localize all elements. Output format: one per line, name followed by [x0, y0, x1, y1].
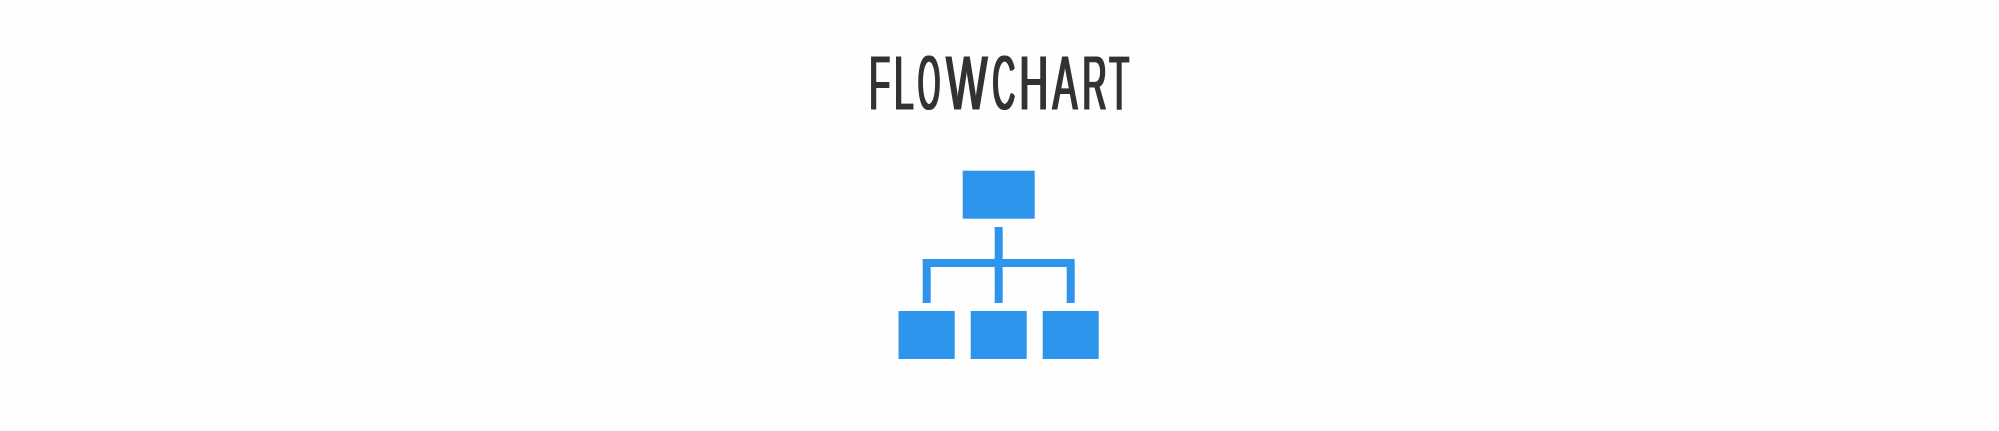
title: T: [1109, 41, 1129, 126]
bottom left box: [898, 311, 955, 359]
title: H: [1019, 40, 1048, 126]
title: [869, 39, 1129, 127]
connector lines: [923, 227, 1075, 303]
top box: [963, 171, 1035, 219]
title: O: [918, 42, 940, 127]
title: C: [992, 41, 1015, 126]
title: W: [946, 42, 987, 126]
title: A: [1053, 41, 1077, 126]
bottom right box: [1043, 311, 1099, 359]
icon: flowchart hierarchy: [898, 171, 1099, 359]
title: R: [1083, 39, 1107, 126]
bottom middle box: [971, 311, 1027, 359]
title: L: [894, 40, 914, 126]
title: F: [869, 40, 890, 126]
